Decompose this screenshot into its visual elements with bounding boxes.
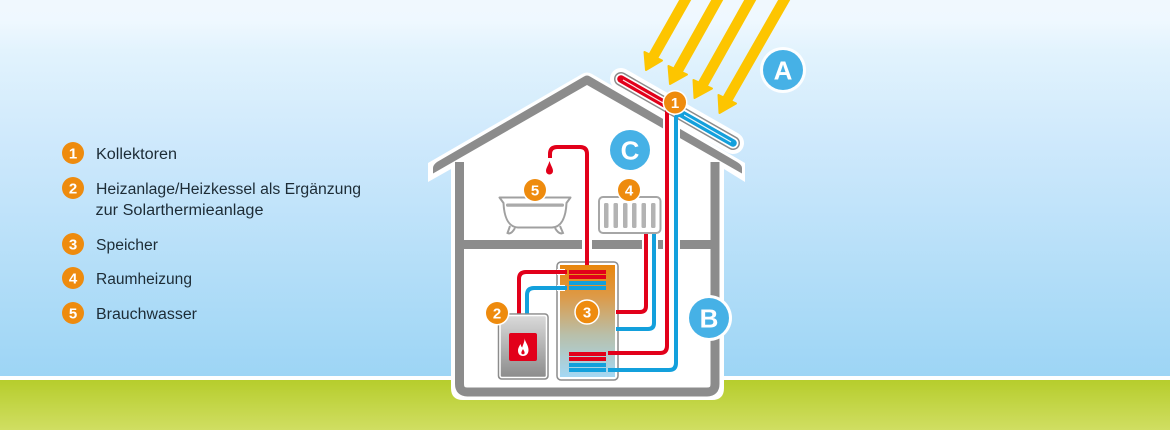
upper heat exchanger [569,270,606,290]
walls [460,162,715,392]
marker C [610,130,650,170]
hot pipe entry [585,258,589,265]
arrow 2 [668,0,720,84]
roof [433,76,742,174]
marker 2: 2 [493,306,501,322]
storage tank [548,258,620,380]
marker 5: 5 [531,182,539,200]
ground [0,376,1170,430]
marker B [686,295,732,341]
house white silhouette [428,72,745,400]
arrow 4 [718,0,787,113]
marker 1: 1 [671,95,679,112]
legend [62,142,361,324]
marker A: A [774,56,793,86]
marker 4 [616,178,642,202]
legend item 1: Kollektoren [96,146,177,163]
legend item 2: Heizanlage/Heizkessel als Ergänzung [96,181,361,198]
lower heat exchanger [569,352,606,372]
collector outline [621,79,733,143]
collector hot side [621,79,665,104]
bathtub [500,198,570,233]
arrow 3 [694,0,753,98]
collector tubes highlight [623,80,731,142]
marker 5 [522,178,548,202]
floor [464,240,711,249]
legend item 2: 2 [69,180,77,198]
arrow 1 [644,0,688,70]
radiator [599,197,660,233]
house [428,72,745,400]
water drop [546,161,553,174]
legend item 3: Speicher [96,237,158,254]
legend item 4: 4 [69,270,78,288]
marker 2 [484,300,510,326]
legend item 5: 5 [69,306,77,322]
boiler pipes [519,272,569,316]
legend item 2 [62,177,361,219]
marker 4: 4 [625,182,634,200]
legend item 3 [62,233,158,255]
legend item 1: 1 [69,146,77,162]
collector [621,79,733,143]
marker B: B [700,304,718,334]
legend item 4 [62,267,192,289]
marker A [760,47,806,93]
solar collector circuit pipes [608,110,684,370]
tank connectors [608,312,620,370]
pipe gaps [582,108,680,251]
legend item 4: Raumheizung [96,271,192,288]
sun arrows [644,0,787,113]
shower pipe [550,147,587,265]
marker 1 [662,90,688,115]
collector cold side [680,113,733,143]
legend item 5: Brauchwasser [96,306,197,323]
boiler feed pipe stubs [557,272,565,288]
boiler [498,314,548,379]
legend item 5 [62,302,197,324]
marker C: C [621,136,640,166]
legend item 1 [62,142,177,164]
marker 3: 3 [583,304,591,322]
icon: flame [509,333,537,361]
legend item 3: 3 [69,236,77,254]
radiator pipes [616,233,658,329]
legend item 2: zur Solarthermieanlage [96,202,264,219]
